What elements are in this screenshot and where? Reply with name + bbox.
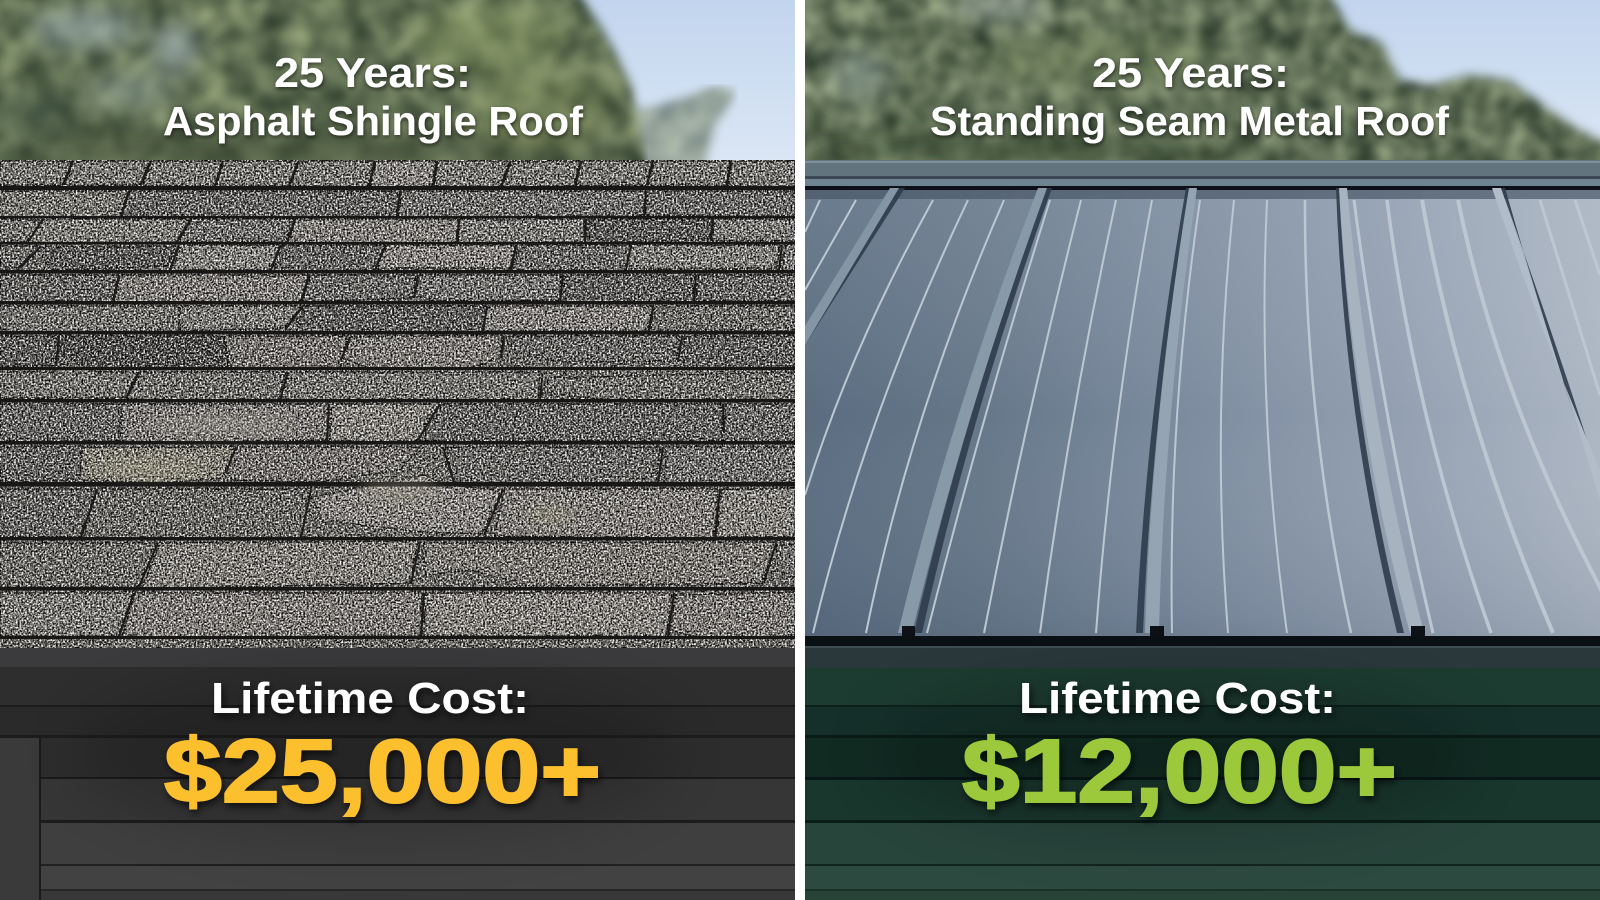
shingle courses: [0, 160, 795, 648]
standing seams: [805, 188, 1600, 633]
seam feet: [902, 626, 1425, 636]
panel: asphalt shingle roof: [0, 0, 795, 900]
background: sky and blurred tree: [0, 0, 795, 175]
lifetime cost: metal: Lifetime Cost:: [1019, 674, 1336, 723]
background: sky and blurred trees: [790, 0, 1600, 170]
heading: asphalt: Asphalt Shingle Roof: [163, 98, 583, 144]
heading: metal: Standing Seam Metal Roof: [930, 98, 1449, 144]
roof underlayer: [0, 160, 795, 648]
gutter and dark siding: [0, 648, 795, 900]
lifetime cost: metal: $12,000+: [962, 722, 1397, 822]
shingle roof: [0, 160, 795, 648]
shingle butt joints: [20, 161, 782, 636]
heading: metal: [930, 49, 1449, 144]
lifetime cost: metal: [962, 674, 1397, 822]
lifetime cost: asphalt: $25,000+: [164, 722, 601, 822]
heading: asphalt: 25 Years:: [274, 49, 471, 96]
gutter and green siding: [805, 636, 1600, 900]
ridge cap: [805, 160, 1600, 190]
panel ribs: [805, 200, 1600, 633]
worn lichen patches: [95, 415, 574, 523]
lifetime cost: asphalt: [164, 674, 601, 822]
heading: asphalt: [163, 49, 583, 144]
metal roof: [805, 160, 1600, 640]
lifetime cost: asphalt: Lifetime Cost:: [211, 674, 529, 723]
metal panels: [805, 190, 1600, 640]
shadow lines under shingle courses: [0, 186, 795, 639]
corner trim: [0, 738, 41, 900]
heading: metal: 25 Years:: [1092, 49, 1289, 96]
panel: standing seam metal roof: [790, 0, 1600, 900]
